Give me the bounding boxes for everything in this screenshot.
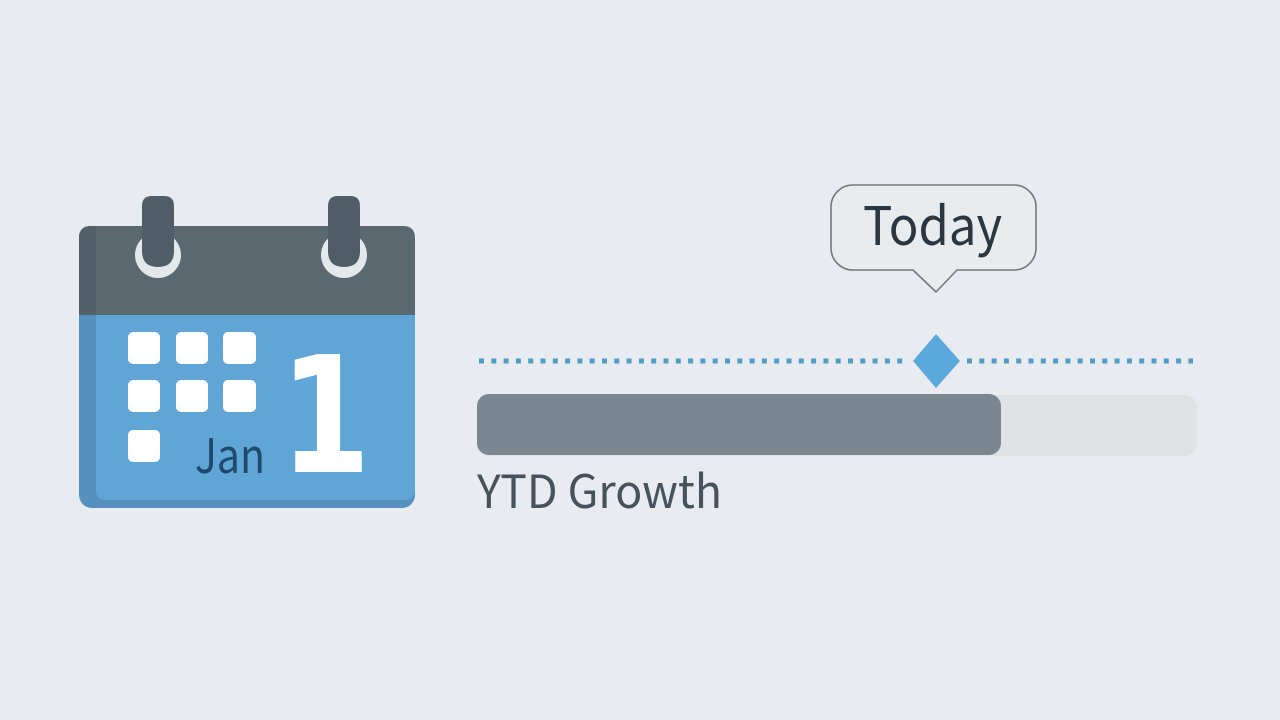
dotted line before marker bbox=[479, 358, 906, 364]
callout text: Today bbox=[863, 185, 1002, 261]
callout: today bbox=[831, 185, 1036, 292]
date grid squares bbox=[128, 332, 256, 462]
icon: calendar bbox=[79, 196, 415, 511]
month label: Jan bbox=[195, 417, 265, 487]
progress bar bbox=[477, 394, 1197, 456]
calendar body bbox=[79, 290, 415, 508]
left binding ring bbox=[135, 196, 181, 278]
callout bubble bbox=[831, 185, 1036, 292]
progress fill bbox=[477, 394, 1001, 455]
calendar header bbox=[79, 226, 415, 315]
dotted line after marker bbox=[967, 358, 1193, 364]
progress track bbox=[477, 395, 1197, 456]
timeline bbox=[479, 334, 1193, 388]
progress label: YTD Growth bbox=[476, 456, 722, 522]
day number: 1 bbox=[280, 322, 371, 511]
today marker diamond bbox=[913, 334, 960, 388]
right binding ring bbox=[321, 196, 367, 278]
